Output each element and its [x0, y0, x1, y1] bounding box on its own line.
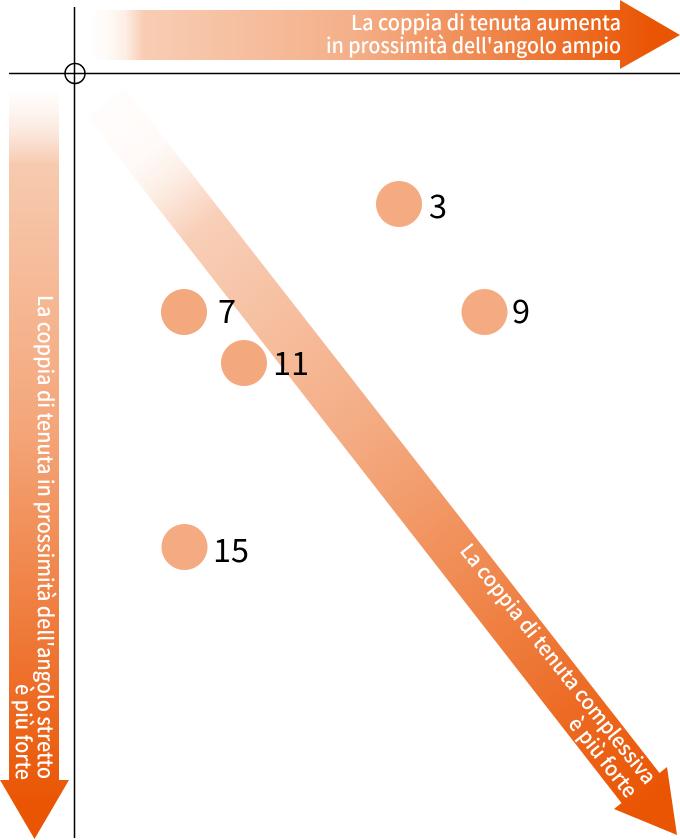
data point 3: 3 — [429, 181, 447, 228]
data point 9: 9 — [512, 286, 530, 333]
data point 7 — [161, 286, 236, 335]
data point 3 — [376, 181, 447, 228]
arrow: left narrow-angle torque — [0, 90, 69, 839]
label: left arrow text — [10, 295, 62, 780]
arrow: diagonal overall torque — [87, 88, 677, 835]
data point 15 — [162, 524, 249, 572]
label: top arrow text — [326, 6, 621, 59]
data point 7: 7 — [218, 286, 236, 333]
data point 15: 15 — [213, 525, 249, 572]
label: left arrow text: è più forte — [10, 684, 40, 780]
data point 9 — [462, 286, 530, 335]
arrow: top wide-angle torque — [90, 0, 680, 69]
label: diagonal arrow text: è più forte — [563, 709, 646, 803]
data point 11: 11 — [273, 338, 309, 385]
label: diagonal arrow text: La coppia di tenuta complessiva — [454, 536, 665, 790]
label: top arrow text: in prossimità dell'angolo ampio — [326, 29, 621, 59]
label: top arrow text: La coppia di tenuta aumenta — [351, 6, 621, 36]
label: left arrow text: La coppia di tenuta in prossimità dell'angolo stretto — [32, 295, 62, 779]
data point 11 — [221, 338, 309, 386]
